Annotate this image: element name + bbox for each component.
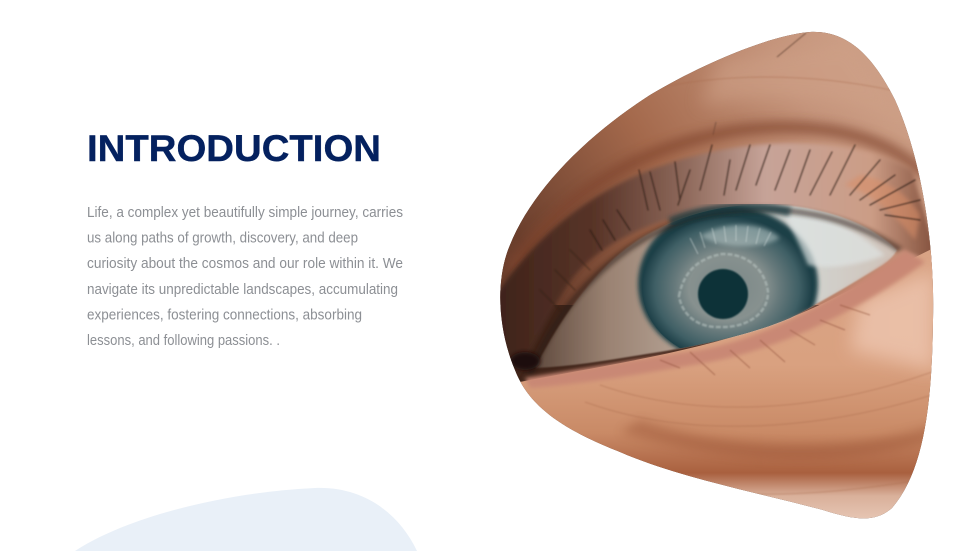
upper lashes: [540, 145, 920, 310]
body text: Life, a complex yet beautifully simple journey, carries: [87, 205, 403, 221]
body text: navigate its unpredictable landscapes, accumulating: [87, 282, 398, 298]
lower skin wrinkles: [585, 77, 932, 494]
brow hairs: [713, 33, 806, 135]
upper skin: [490, 20, 950, 305]
body text: experiences, fostering connections, absorbing: [87, 308, 362, 324]
lower skin: [520, 250, 934, 518]
base tone: [500, 32, 934, 518]
inner corner: [510, 352, 540, 370]
body text: us along paths of growth, discovery, and deep: [87, 230, 358, 246]
lower lid rim: [525, 250, 925, 388]
eye white: [535, 205, 897, 368]
shadow under upper lid: [530, 209, 900, 375]
eye photo: [500, 32, 934, 518]
body text: [87, 205, 403, 349]
eyelid: [480, 143, 940, 390]
lower lashes: [660, 305, 870, 375]
iris and pupil: [638, 206, 885, 362]
lid crease: [510, 127, 925, 270]
title: INTRODUCTION: [87, 128, 381, 169]
body text: curiosity about the cosmos and our role within it. We: [87, 256, 403, 272]
background blob: [75, 488, 417, 551]
body text: lessons, and following passions. .: [87, 333, 280, 349]
